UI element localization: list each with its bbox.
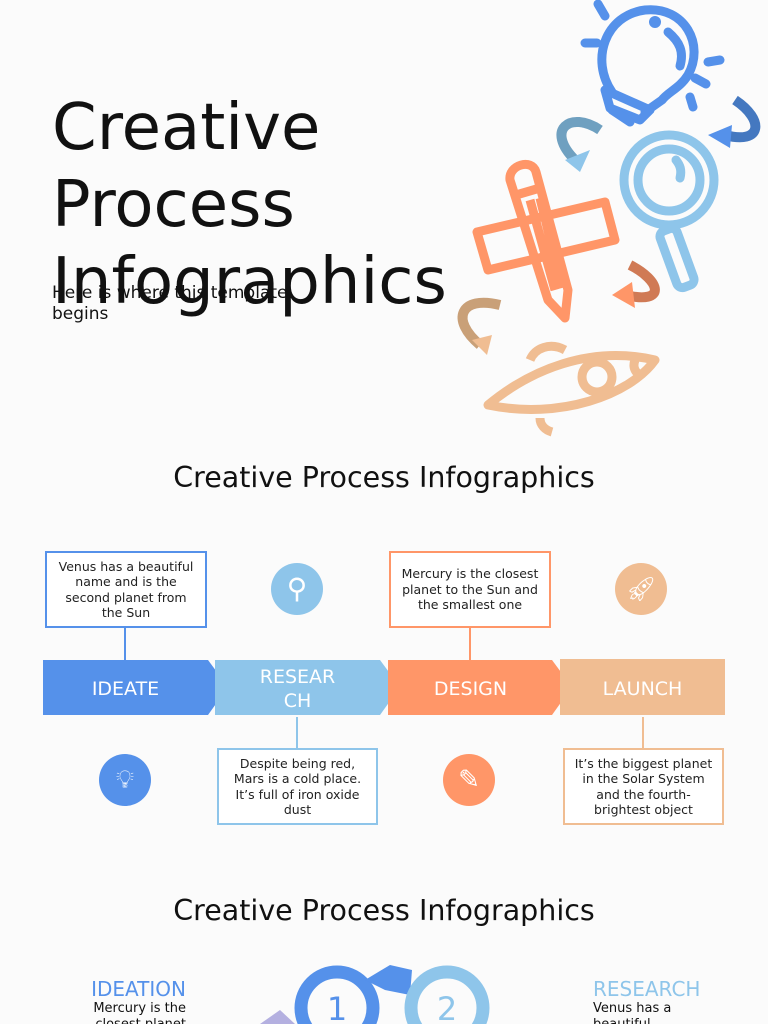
box: design text: Mercury is the closest planet to the Sun and the smallest one bbox=[402, 566, 538, 612]
cycle diagram bbox=[91, 965, 700, 1024]
arrow chevrons bbox=[43, 659, 725, 715]
hero illustration bbox=[458, 0, 760, 436]
research text bbox=[593, 977, 700, 1024]
label: research: CH bbox=[284, 690, 311, 712]
icon: research magnifier: ⚲ bbox=[287, 572, 307, 605]
icon: bulb: 💡︎ bbox=[116, 765, 134, 795]
label: launch: LAUNCH bbox=[603, 678, 682, 700]
box: research text: Despite being red, Mars is a cold place. It’s full of iron oxide dust bbox=[234, 756, 361, 817]
box: ideate text: Venus has a beautiful name and is the second planet from the Sun bbox=[59, 558, 193, 620]
icon: research magnifier bbox=[271, 563, 323, 615]
icon: bulb bbox=[99, 754, 151, 806]
arrows bbox=[561, 122, 600, 160]
icon: magnifier bbox=[624, 135, 714, 289]
box: launch text: It’s the biggest planet in the Solar System and the fourth-brightest object bbox=[575, 756, 712, 817]
ideation text bbox=[91, 977, 186, 1024]
title: Creative bbox=[52, 91, 320, 165]
label: design: DESIGN bbox=[434, 678, 507, 700]
title: Process bbox=[52, 168, 295, 242]
icon: launch rocket: 🚀︎ bbox=[626, 575, 656, 603]
icon: design tools bbox=[443, 754, 495, 806]
circles bbox=[260, 965, 490, 1024]
title: Infographics bbox=[52, 245, 447, 319]
icon: rocket bbox=[488, 346, 655, 432]
box: research text bbox=[217, 748, 378, 825]
icon: lightbulb bbox=[585, 4, 720, 122]
box: launch text bbox=[563, 748, 724, 825]
ideation text: IDEATION bbox=[91, 977, 186, 1001]
title bbox=[52, 91, 447, 319]
icon: design tools: ✎ bbox=[458, 765, 480, 795]
label: research bbox=[260, 666, 335, 712]
section heading 1: Creative Process Infographics bbox=[173, 461, 595, 494]
process timeline bbox=[43, 551, 725, 825]
box: design text bbox=[389, 551, 551, 628]
icon: pencil ruler bbox=[477, 164, 615, 318]
section heading 2: Creative Process Infographics bbox=[173, 894, 595, 927]
icon: launch rocket bbox=[615, 563, 667, 615]
research text: RESEARCH bbox=[593, 977, 700, 1001]
subtitle: Here is where this template begins bbox=[52, 283, 288, 324]
box: ideate text bbox=[45, 551, 207, 628]
label: ideate: IDEATE bbox=[92, 678, 159, 700]
label: research: RESEAR bbox=[260, 666, 335, 688]
